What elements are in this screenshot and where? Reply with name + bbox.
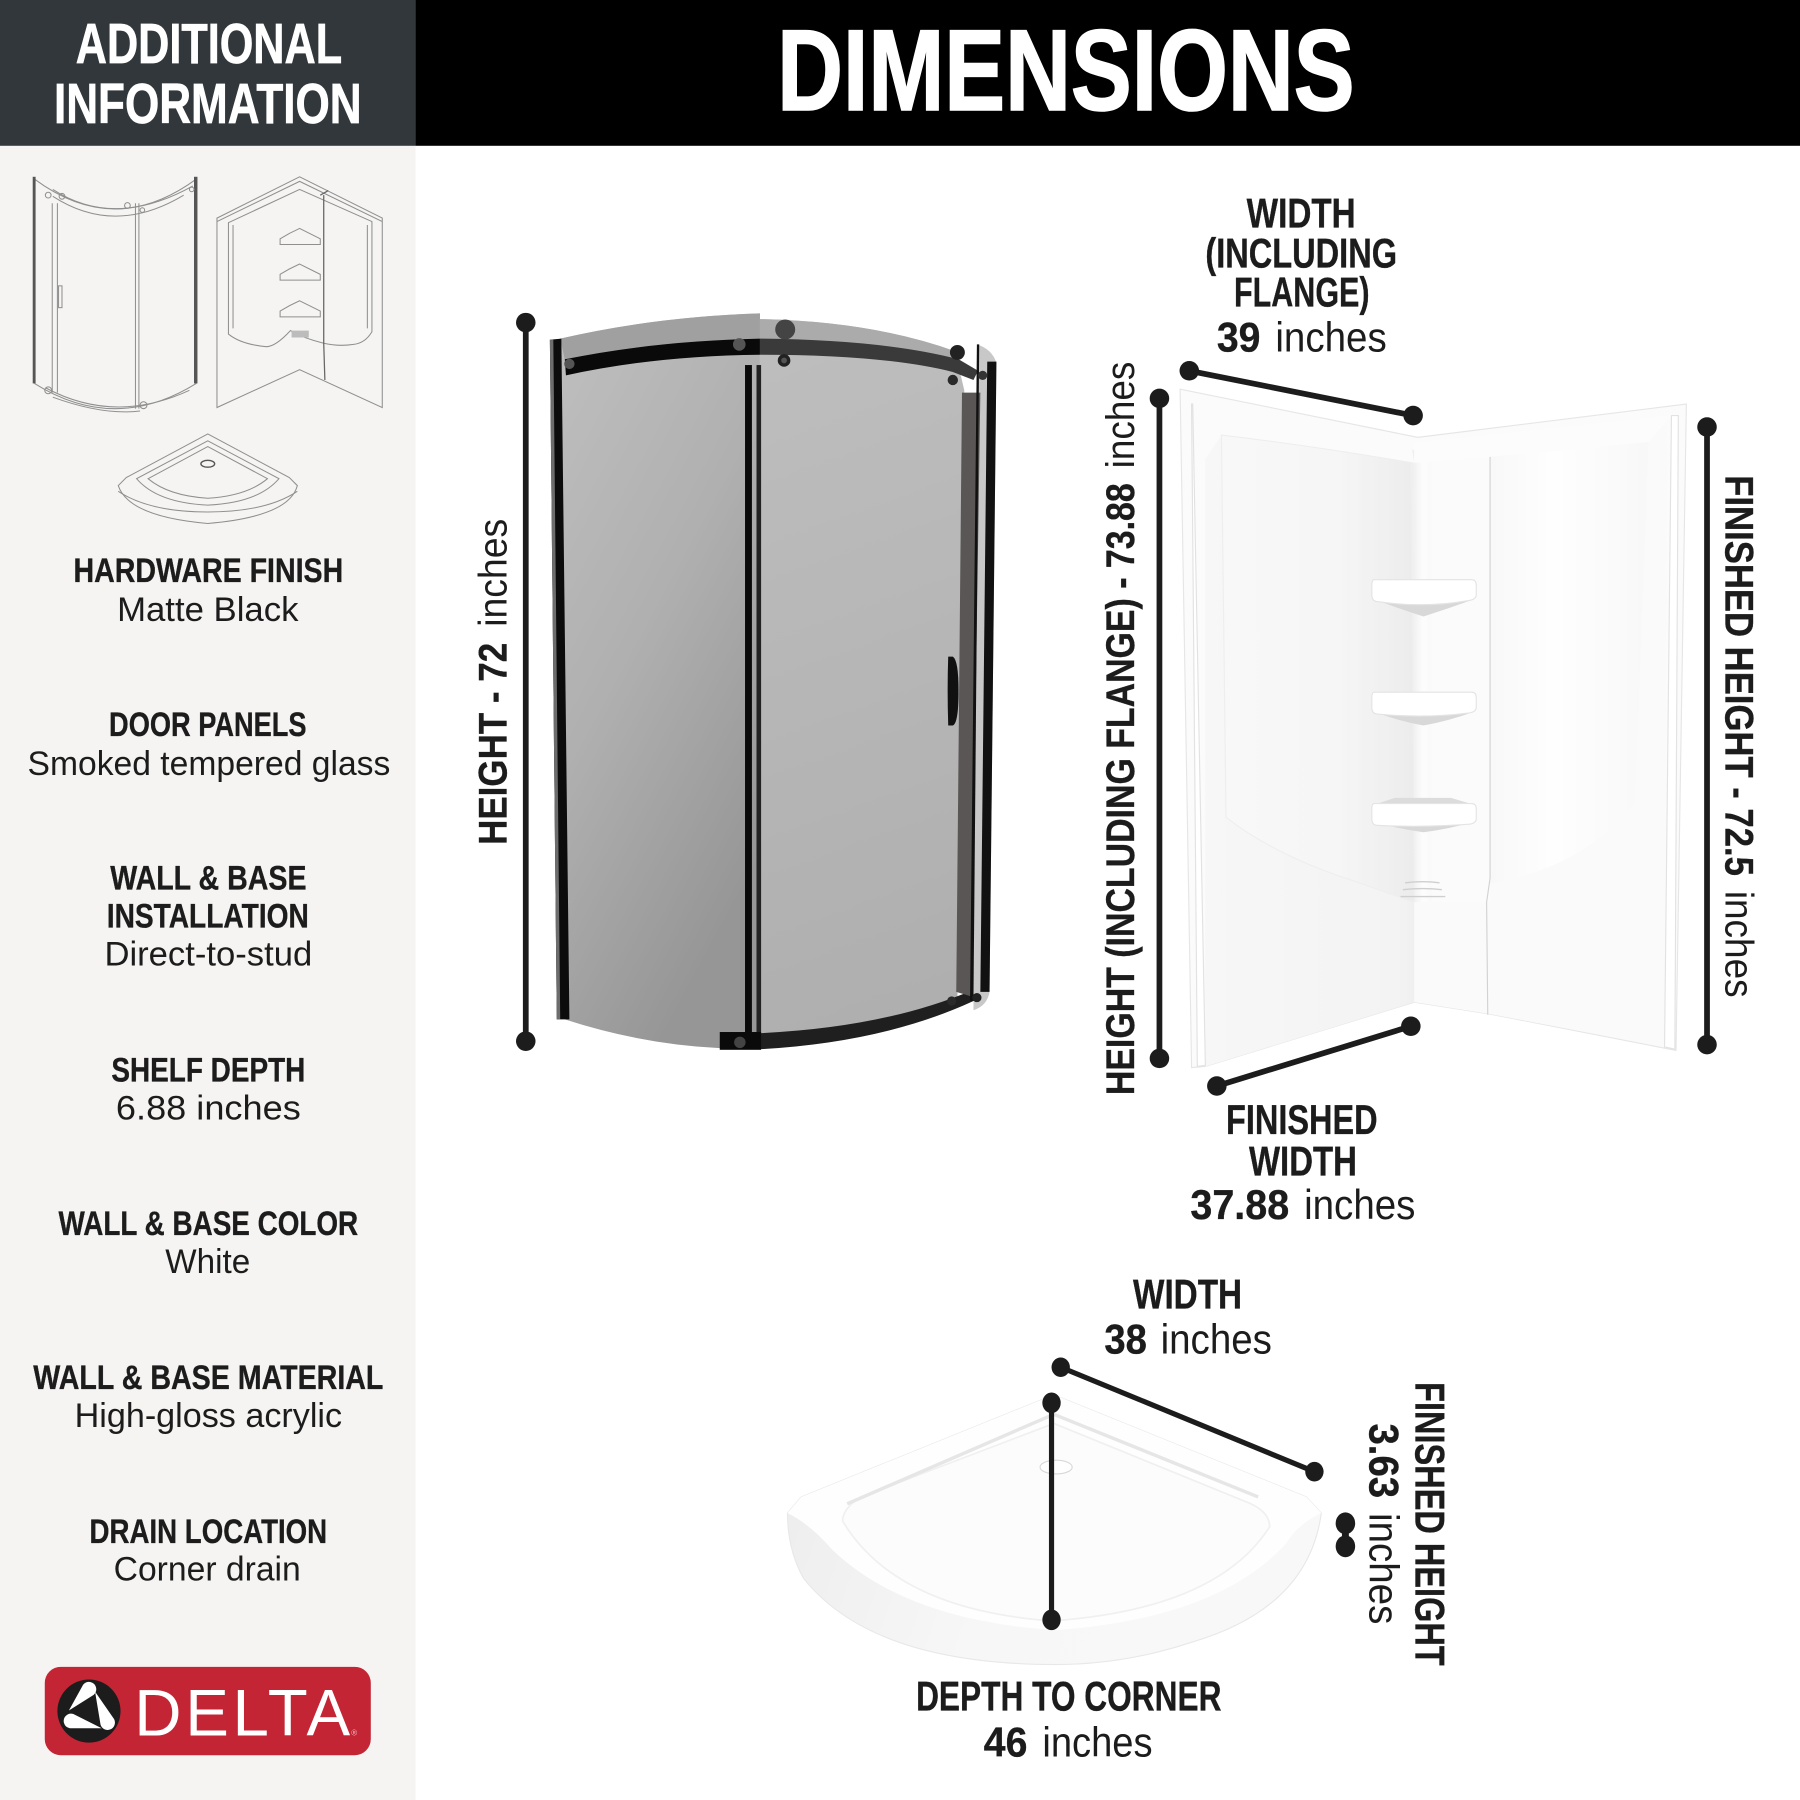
rollers: [733, 338, 746, 351]
logo: delta: [45, 1667, 371, 1755]
dimension line: wall finished height: [1697, 417, 1717, 1054]
drain ribs: [1401, 882, 1445, 897]
header: additional information: ADDITIONAL: [76, 12, 342, 75]
label: base depth to corner: 46: [984, 1719, 1027, 1765]
logo: delta: ®: [351, 1729, 357, 1738]
spec: door panels: DOOR PANELS: [109, 706, 307, 744]
top rail right: [760, 339, 978, 380]
spec: wall and base color: WALL & BASE COLOR: [59, 1205, 358, 1243]
spec: drain location: [90, 1513, 327, 1589]
spec: wall and base color: [59, 1205, 358, 1281]
door handle: [948, 657, 959, 726]
label: wall height including flange: HEIGHT (INCLUDING FLANGE) - 73.88: [1098, 483, 1143, 1095]
dimension line: base width: [1052, 1357, 1324, 1481]
dimension line: wall finished width: [1207, 1017, 1421, 1096]
wall surround product: [1180, 389, 1686, 1068]
spec: wall and base installation: [104, 860, 312, 973]
right wall body: [1488, 425, 1667, 1047]
dimension line: base finished height: [1336, 1512, 1355, 1557]
bottom bracket: [720, 1032, 761, 1050]
label: wall width including flange: [1205, 190, 1397, 360]
left vertical profile: [550, 339, 569, 1019]
label: wall finished width: FINISHED: [1226, 1097, 1378, 1143]
header: dimensions title: [416, 0, 1800, 146]
drain: [1040, 1460, 1072, 1474]
spec: wall and base material: [33, 1359, 383, 1435]
label: wall height including flange: inches: [1098, 362, 1143, 468]
icon: door line drawing: [33, 177, 197, 412]
label: base finished height: [1361, 1382, 1452, 1666]
label: wall finished height: inches: [1716, 891, 1761, 998]
header: additional information: INFORMATION: [54, 72, 362, 135]
left glass panel: [560, 313, 760, 1048]
label: wall width including flange: (INCLUDING: [1205, 230, 1397, 276]
dimension line: base depth: [1042, 1392, 1061, 1630]
spec: wall and base installation: WALL & BASE: [110, 860, 307, 898]
centre vertical profiles: [745, 365, 752, 1038]
spec: door panels: [28, 706, 390, 783]
label: base width: [1104, 1272, 1272, 1362]
spec: wall and base material: High-gloss acrylic: [75, 1397, 342, 1435]
shelf 3: [1372, 798, 1476, 832]
corner column: [1414, 463, 1432, 902]
spec: hardware finish: HARDWARE FINISH: [73, 552, 343, 590]
spec: hardware finish: [73, 552, 343, 629]
basin rim: [843, 1423, 1270, 1621]
label: wall width including flange: 39: [1217, 314, 1260, 360]
label: base width: WIDTH: [1133, 1272, 1242, 1318]
top rail left: [565, 339, 760, 375]
icon: wall line drawing: [217, 177, 382, 408]
shower base product: [788, 1395, 1321, 1665]
spec: wall and base color: White: [165, 1243, 250, 1281]
spec: drain location: Corner drain: [114, 1551, 301, 1589]
left wall body: [1205, 411, 1414, 1066]
right glass top band: [760, 319, 964, 373]
spec: drain location: DRAIN LOCATION: [90, 1513, 327, 1551]
right door edge panel: [956, 393, 980, 996]
wall outer shell: [1180, 389, 1686, 1068]
left recess: [1221, 435, 1414, 902]
label: wall finished width: inches: [1304, 1182, 1415, 1228]
spec: shelf depth: SHELF DEPTH: [111, 1051, 305, 1089]
label: wall finished height: FINISHED HEIGHT - 72.5: [1716, 475, 1761, 876]
label: wall finished width: 37.88: [1190, 1182, 1289, 1228]
base shell: [788, 1395, 1321, 1665]
label: wall width including flange: FLANGE): [1234, 270, 1370, 316]
spec: hardware finish: Matte Black: [117, 591, 299, 629]
sidebar background: [0, 0, 416, 1800]
header: dimensions title: DIMENSIONS: [777, 7, 1355, 135]
spec: shelf depth: [111, 1051, 305, 1127]
label: base width: 38: [1104, 1316, 1147, 1362]
right flange: [1665, 416, 1678, 1049]
icon: base line drawing: [118, 434, 297, 523]
label: door height: inches: [470, 519, 515, 627]
label: base finished height: inches: [1361, 1513, 1407, 1624]
spec: wall and base installation: INSTALLATION: [107, 898, 309, 936]
dimension line: wall height with flange: [1150, 389, 1169, 1068]
label: base depth to corner: [916, 1673, 1221, 1765]
label: wall finished width: WIDTH: [1249, 1139, 1357, 1185]
lower corner: [1414, 902, 1488, 1014]
shelf 2: [1372, 692, 1476, 726]
left flange: [1192, 404, 1205, 1066]
header: additional information: [0, 0, 416, 146]
logo: delta: DELTA: [134, 1677, 350, 1750]
bottom rail: [760, 991, 973, 1049]
label: wall width including flange: WIDTH: [1247, 190, 1356, 236]
shelf 1: [1372, 580, 1476, 616]
label: base finished height: 3.63: [1361, 1423, 1407, 1498]
label: wall finished width: [1190, 1097, 1415, 1228]
label: door height: HEIGHT - 72: [470, 643, 515, 845]
label: base finished height: FINISHED HEIGHT: [1406, 1382, 1452, 1666]
label: wall width including flange: inches: [1275, 314, 1387, 360]
dimension line: wall width with flange: [1180, 361, 1423, 425]
spec: door panels: Smoked tempered glass: [28, 745, 390, 783]
label: base depth to corner: inches: [1042, 1719, 1153, 1765]
right recess: [1490, 442, 1648, 884]
left glass top band: [560, 313, 760, 359]
spec: wall and base material: WALL & BASE MATERIAL: [33, 1359, 383, 1397]
dimension line: door height: [516, 313, 536, 1051]
label: base width: inches: [1161, 1316, 1272, 1362]
spec: shelf depth: 6.88 inches: [116, 1089, 301, 1127]
top flange band: [1194, 406, 1414, 463]
spec: wall and base installation: Direct-to-stud: [104, 935, 312, 973]
deck: [788, 1395, 1321, 1630]
seam: [1487, 457, 1490, 1015]
right glass panel: [760, 319, 964, 1049]
far right glass sliver: [973, 344, 996, 1010]
label: base depth to corner: DEPTH TO CORNER: [916, 1673, 1221, 1719]
shower door product: [550, 313, 996, 1050]
